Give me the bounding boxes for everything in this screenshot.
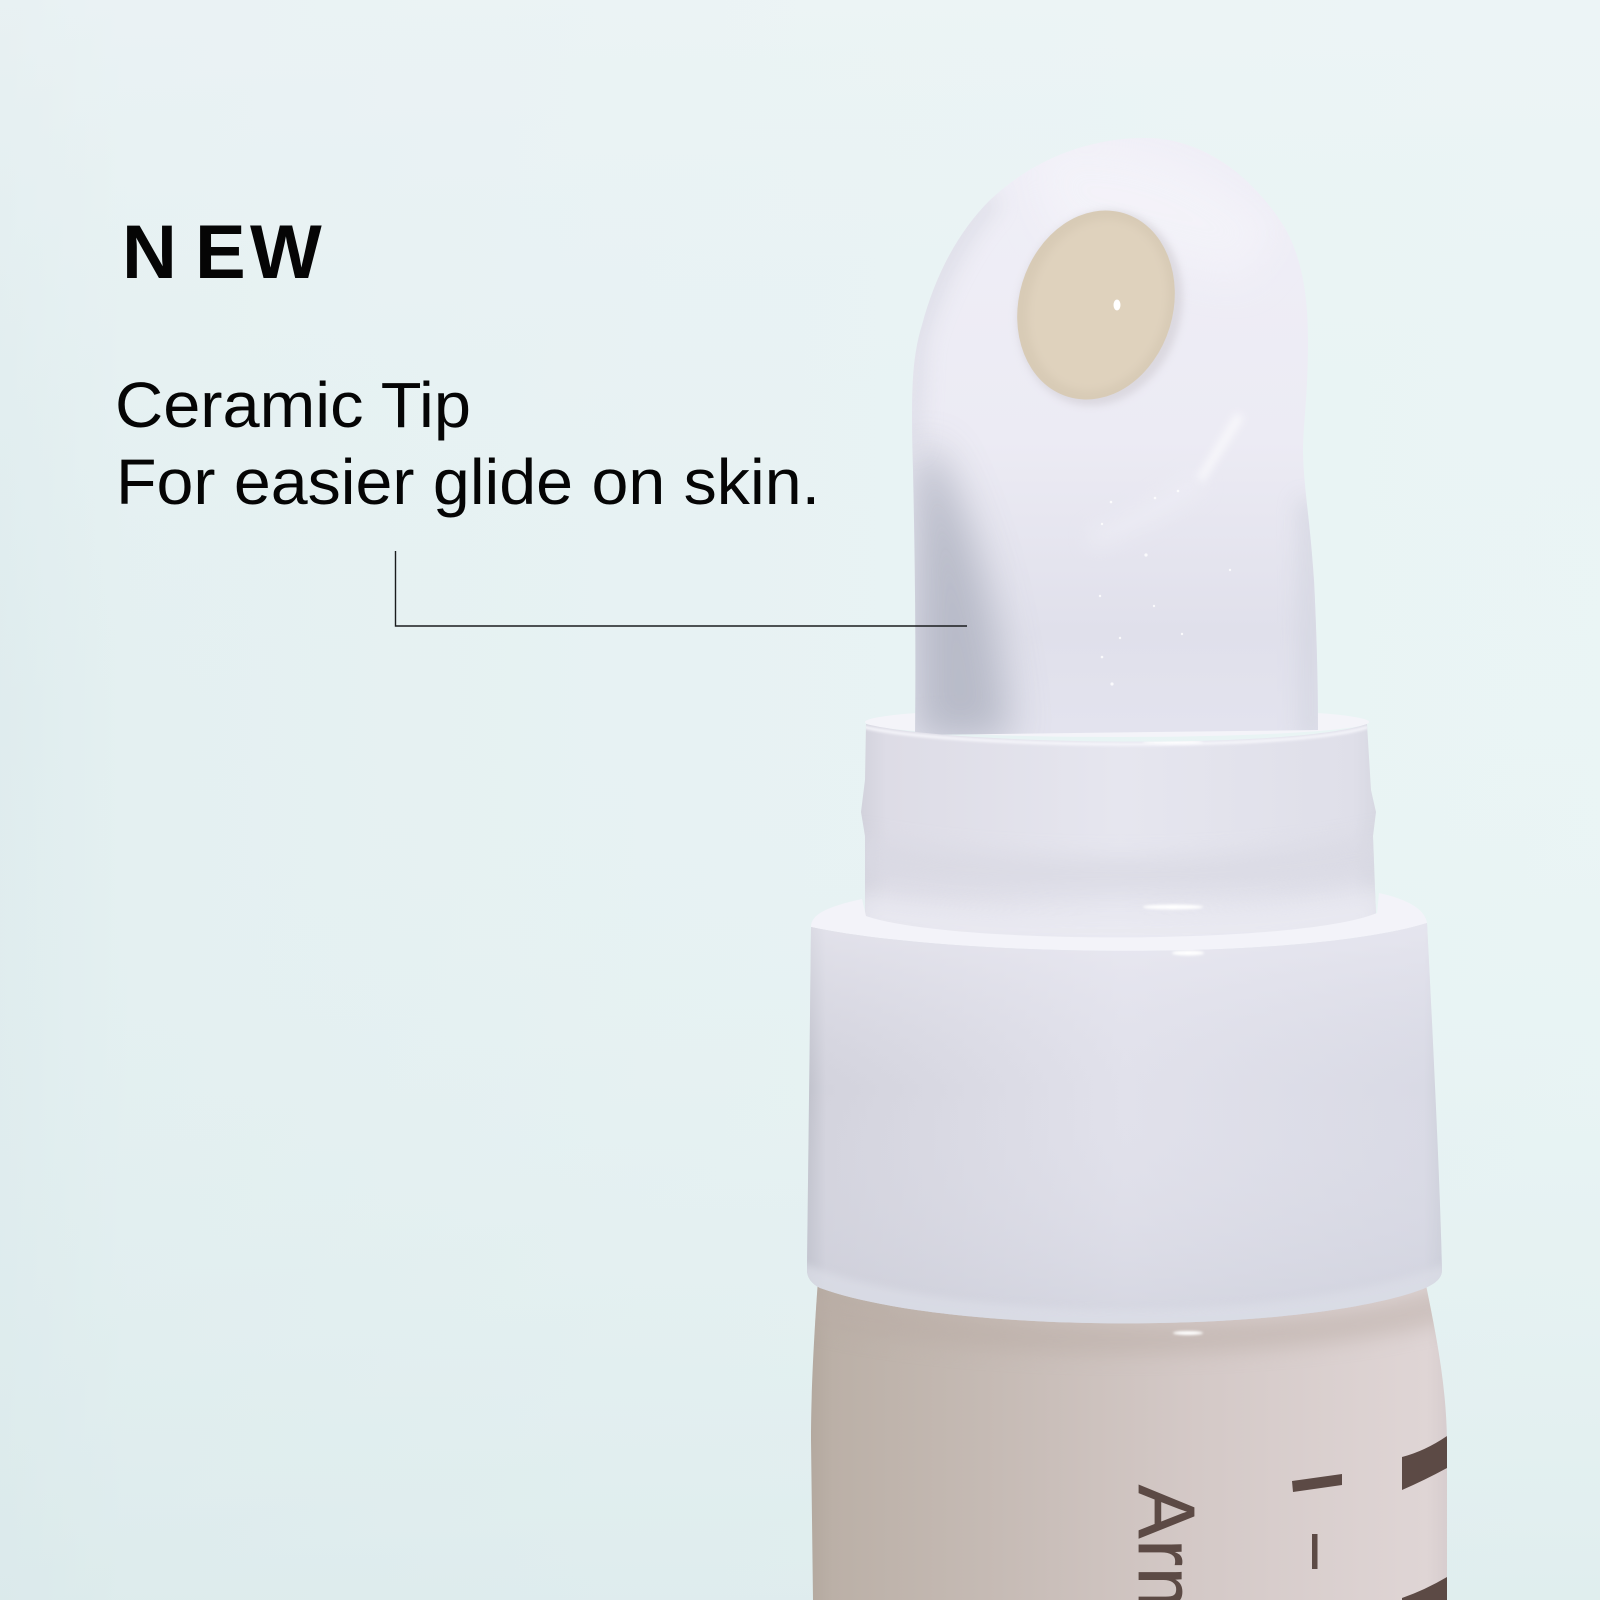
callout line pointing to tip	[396, 551, 967, 626]
body highlight	[1173, 1331, 1203, 1335]
tube body	[800, 1270, 1460, 1600]
text block: ceramic tip description	[115, 369, 820, 518]
neck collar	[861, 724, 1376, 938]
printed label marks	[1292, 1436, 1447, 1600]
neck back rim	[865, 707, 1369, 737]
line 1: Ceramic Tip	[115, 369, 471, 441]
ceramic tip	[912, 146, 1318, 735]
tip sheen	[1201, 419, 1238, 476]
cap	[800, 920, 1450, 1340]
tip sparkles	[1099, 490, 1231, 686]
cap top rim	[811, 893, 1427, 951]
serum droplet	[994, 190, 1206, 426]
product: tube with ceramic tip	[800, 120, 1460, 1600]
heading: NEW: NEW	[122, 210, 322, 295]
line 2: For easier glide on skin.	[116, 446, 820, 518]
